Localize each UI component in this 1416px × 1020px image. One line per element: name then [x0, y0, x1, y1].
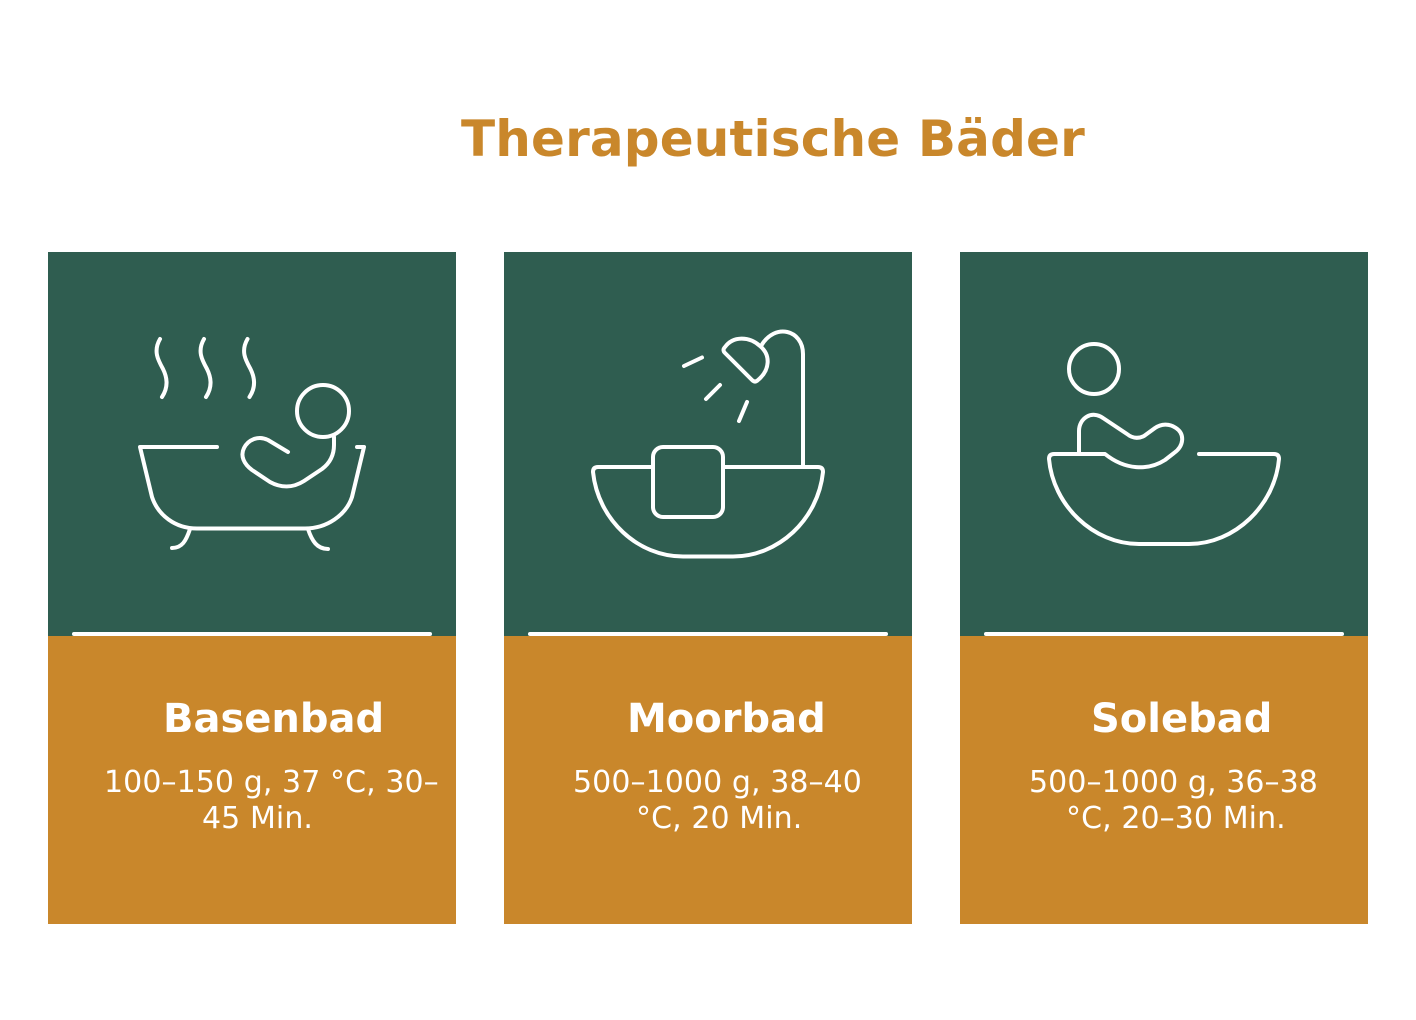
- description: Basenbad: 100–150 g, 37 °C, 30–: [104, 765, 439, 800]
- description: Basenbad: 45 Min.: [202, 801, 313, 836]
- description: Moorbad: 500–1000 g, 38–40: [573, 765, 862, 800]
- description: Solebad: 500–1000 g, 36–38: [1029, 765, 1318, 800]
- icon: bathtub with person and steam: [140, 339, 364, 549]
- text area: Basenbad: [48, 636, 456, 924]
- image area: Moorbad: [504, 252, 912, 636]
- image area: Solebad: [960, 252, 1368, 636]
- heading: Solebad: Solebad: [1091, 696, 1272, 742]
- description: Moorbad: °C, 20 Min.: [636, 801, 802, 836]
- image area: Basenbad: [48, 252, 456, 636]
- heading: Moorbad: Moorbad: [627, 696, 826, 742]
- icon: bowl with block and shower: [593, 332, 823, 556]
- icon: person in bowl: [1049, 344, 1279, 544]
- description: Solebad: °C, 20–30 Min.: [1066, 801, 1286, 836]
- panel: Moorbad: [504, 252, 912, 924]
- panel: Solebad: [960, 252, 1368, 924]
- text area: Solebad: [960, 636, 1368, 924]
- panel: Basenbad: [48, 252, 456, 924]
- text area: Moorbad: [504, 636, 912, 924]
- heading: Basenbad: Basenbad: [163, 696, 384, 742]
- title: Therapeutische Bäder: [461, 110, 1085, 168]
